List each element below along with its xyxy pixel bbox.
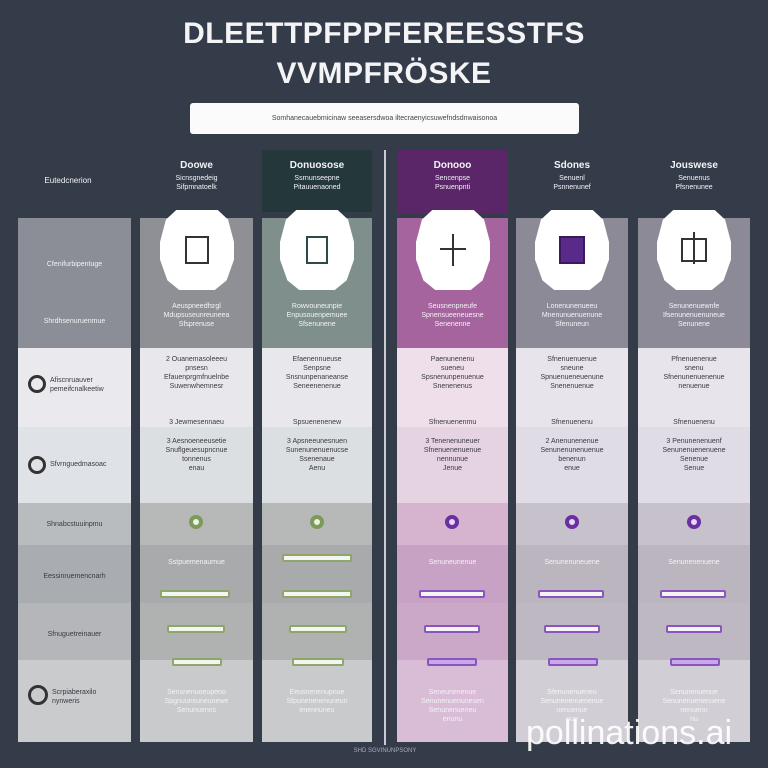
column 5: Pfnenuenenue <box>671 356 717 363</box>
column 5: Pfsnenunee <box>675 184 713 191</box>
column: labels: Scrpiaberaxilo <box>52 689 96 696</box>
column 5: Sfnenunenuenenue <box>663 374 725 381</box>
column 4: Spnuenueneuenune <box>540 374 604 381</box>
column 3: sueneu <box>441 365 464 372</box>
icon: dot <box>565 515 579 529</box>
column 1: tonnenus <box>182 456 211 463</box>
column 3 <box>397 150 508 742</box>
column 4: Senunenuneuene <box>544 559 600 566</box>
icon: dot <box>445 515 459 529</box>
column 4: Sfenunenueneu <box>547 689 597 696</box>
column: labels: Eessinruemencnarh <box>43 573 106 580</box>
icon: dot <box>687 515 701 529</box>
column 4: Psnnenunef <box>553 184 591 191</box>
column 3: Snenenenus <box>433 383 472 390</box>
column 3: Sfnenuenenuenue <box>424 447 481 454</box>
title <box>183 17 585 90</box>
column 2: Pitauuenaoned <box>293 184 341 191</box>
column 1: Snuflgeuesupncnue <box>166 447 227 454</box>
column 5: Ifsenunenuenuneue <box>663 312 725 319</box>
column 4: Senunenenuenenue <box>540 698 604 705</box>
column: labels: Cfenifurbipentuge <box>47 261 102 268</box>
column 3: Seneunenenue <box>429 689 476 696</box>
column 4: Sfnenuenuenue <box>547 356 597 363</box>
icon: hexagon <box>657 210 731 290</box>
icon: dot <box>310 515 324 529</box>
divider <box>384 150 386 745</box>
column 3: enunu <box>443 716 462 723</box>
column 4: Senunenunenuenue <box>540 447 604 454</box>
column 5 <box>638 160 750 742</box>
column 2: enennuneu <box>299 707 335 714</box>
column: labels: Shnabcstuuinpmu <box>46 521 103 528</box>
column 1: Doowe <box>180 160 213 171</box>
column 2: 3 Apsneeunesnuen <box>287 438 347 445</box>
column 5: 3 Penunenenuenf <box>666 438 722 445</box>
column 1: Sicnsgnedeig <box>175 175 218 182</box>
column 1: Sfsprenuse <box>179 321 214 328</box>
column: labels <box>18 176 131 742</box>
column 2: Enpusouenpemuee <box>287 312 347 319</box>
column 5: Senunenuewnfe <box>669 303 719 310</box>
column 5: nu <box>690 716 698 723</box>
column 2: Ssenenaue <box>299 456 335 463</box>
column 1: Aeuspneedfsrgl <box>172 303 221 310</box>
column: labels: Afiscnruauver <box>50 377 93 384</box>
column 2: Snsnunpenaneanse <box>286 374 348 381</box>
column 1: Mdupsuseunreuneea <box>164 312 229 319</box>
column 3: 3 Tenenenuneuer <box>425 438 480 445</box>
column: labels: Sfvrnguedmasoac <box>50 461 106 468</box>
column 2: Sfpunenenenuneun <box>286 698 348 705</box>
column: labels: Sfnuguetreinauer <box>48 631 101 638</box>
column 5: Senunenuenue <box>670 689 718 696</box>
icon: hexagon <box>160 210 234 290</box>
column 1 <box>140 160 253 742</box>
column 4 <box>516 160 628 742</box>
title: DLEETTPFPPFEREESSTFS <box>183 17 585 50</box>
column 5: Senunene <box>678 321 710 328</box>
column 4: sneune <box>561 365 583 372</box>
column 3: Donooo <box>434 160 471 171</box>
column 3: Senenenne <box>435 321 470 328</box>
column: labels: pemeifcnalkeetiw <box>50 386 104 393</box>
column 4: Sdones <box>554 160 590 171</box>
icon: hexagon <box>535 210 609 290</box>
subtitle box <box>190 103 579 134</box>
column 2: Sfsenunene <box>298 321 336 328</box>
column 3: Sencenpse <box>435 175 470 182</box>
column 3: Seusnenpneufe <box>428 303 477 310</box>
column 1: Suwenwhemnesr <box>170 383 223 390</box>
column 4: 2 Anenunenenue <box>546 438 598 445</box>
column 2: Eeusnenenupnue <box>290 689 344 696</box>
column 2: Donuosose <box>290 160 344 171</box>
icon: hexagon <box>416 210 490 290</box>
icon: hexagon <box>280 210 354 290</box>
column 4: benenun <box>558 456 586 463</box>
subtitle box: Somhanecauebmicinaw seeasersdwoa iltecraenyicsuwefndsdnwaisonoa <box>272 115 497 122</box>
column 3: Senunenueneu <box>429 707 476 714</box>
column 3: Senuneunenue <box>429 559 476 566</box>
watermark: pollinations.ai <box>526 714 732 752</box>
column 1: 3 Aesnoeneeusetie <box>167 438 226 445</box>
column 4: Snenenuenue <box>550 383 594 390</box>
column 1: pnsesn <box>185 365 208 372</box>
column 5: Jouswese <box>670 160 718 171</box>
column 5: Senunenuenenuene <box>662 447 726 454</box>
column 3: Psnuenpnti <box>435 184 470 191</box>
column 5: snenu <box>684 365 704 372</box>
column 3: Sfnenuenenmu <box>429 419 476 426</box>
column 1: 2 Ouanemasoleeeu <box>166 356 227 363</box>
column 4: nenuenue <box>556 707 588 714</box>
column 2: Senpsne <box>303 365 331 372</box>
column 3: Spnensueeneuesne <box>421 312 484 319</box>
column: labels: nynweris <box>52 698 80 705</box>
column 2: Sunenunenuenucse <box>286 447 348 454</box>
column 4: Mnenunuenuenune <box>542 312 602 319</box>
column 4: Lonenunenueeu <box>547 303 597 310</box>
column 3: Jenue <box>443 465 462 472</box>
title: VVMPFRÖSKE <box>276 57 492 90</box>
column 1: enau <box>189 465 204 472</box>
column 1: Sensnenuoeupeno <box>167 689 226 696</box>
column 5: nenuenue <box>678 383 710 390</box>
column 5: Senuenus <box>678 175 710 182</box>
column 2: Efaenennueuse <box>292 356 342 363</box>
column 1: Efauenprgmfnuelnbe <box>164 374 229 381</box>
column 3: nennunue <box>437 456 468 463</box>
column 2: Ssrnunseepne <box>294 175 340 182</box>
footer text: SHD SGVINUNPSONY <box>354 748 416 754</box>
column 2 <box>262 150 372 742</box>
column 5: nenuenu <box>680 707 708 714</box>
column 4: Senuenl <box>559 175 585 182</box>
column 4: Sfnenuenenu <box>551 419 593 426</box>
column: labels: Shrdhsenuruenmue <box>44 318 105 325</box>
column 2: Aenu <box>309 465 325 472</box>
column 3: Senunenuenunesen <box>421 698 484 705</box>
column 1: Senunuenns <box>177 707 216 714</box>
column 1: 3 Jewmesennaeu <box>169 419 224 426</box>
column 5: Senunenenuene <box>668 559 720 566</box>
column 4: enue <box>564 465 580 472</box>
column 2: Spsuenenenew <box>293 419 341 426</box>
column 4: nue <box>566 716 578 723</box>
column 3: Paenunenenu <box>431 356 474 363</box>
column: labels: Eutedcnerion <box>44 176 92 185</box>
column 5: Senenue <box>680 456 708 463</box>
column 5: Sfnenuenenu <box>673 419 715 426</box>
column 5: Senunenuenenuene <box>662 698 726 705</box>
icon: row 6 <box>28 685 48 705</box>
icon: dot <box>189 515 203 529</box>
column 3: Spsnenunpenuenue <box>421 374 484 381</box>
column 1: Sstpuemenaumue <box>168 559 225 566</box>
column 2: Seneenenenue <box>293 383 341 390</box>
column 5: Senue <box>684 465 704 472</box>
icon: row 1 <box>28 375 46 393</box>
column 1: Sifpmnatoelk <box>176 184 217 191</box>
icon: row 2 <box>28 456 46 474</box>
column 2: Rowvouneunpie <box>292 303 342 310</box>
column 4: Sfenuneun <box>555 321 589 328</box>
column 1: Spgnuunsuneunewe <box>165 698 228 705</box>
